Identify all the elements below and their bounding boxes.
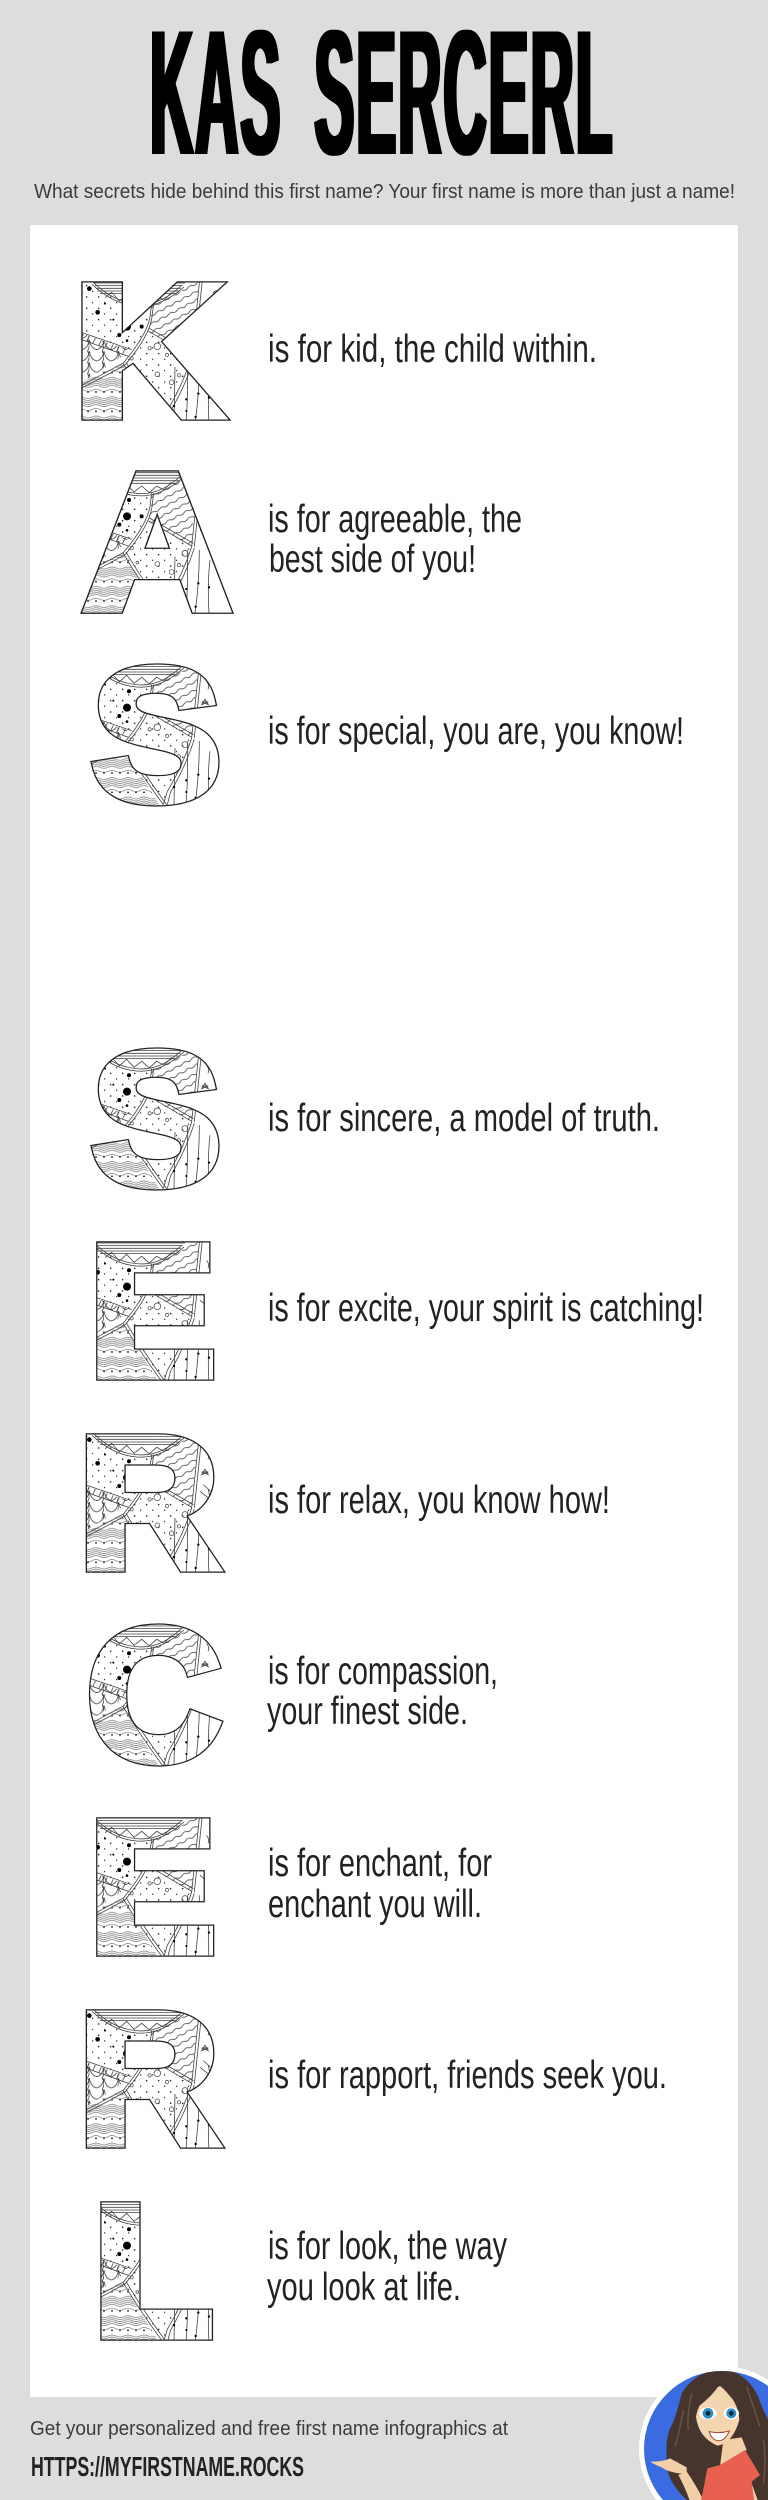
row K: is for kid, the child within. xyxy=(268,328,597,371)
row C xyxy=(88,1623,496,1767)
row E second: is for enchant, for xyxy=(268,1842,492,1885)
row E: E xyxy=(89,1207,216,1415)
row E xyxy=(96,1241,702,1381)
row E second xyxy=(96,1817,492,1957)
row R second xyxy=(86,2009,664,2149)
row A: A xyxy=(84,434,230,649)
row A: is for agreeable, the xyxy=(268,498,522,541)
avatar: woman in circle xyxy=(639,2366,768,2500)
row L xyxy=(100,2201,507,2341)
row E second: E xyxy=(89,1783,216,1991)
row C: C xyxy=(87,1592,221,1799)
row E second: enchant you will. xyxy=(268,1883,482,1926)
row R: is for relax, you know how! xyxy=(268,1479,610,1522)
row C: is for compassion, xyxy=(268,1650,498,1693)
row S xyxy=(90,663,682,807)
row R second: R xyxy=(79,1976,219,2183)
row C: your finest side. xyxy=(267,1690,468,1733)
footer text: Get your personalized and free first name infographics at xyxy=(30,2417,508,2440)
row A xyxy=(80,470,521,614)
row A: best side of you! xyxy=(269,538,476,581)
row R xyxy=(86,1433,608,1573)
row K: K xyxy=(74,248,220,455)
row S second: S xyxy=(92,1016,221,1223)
row R: R xyxy=(79,1400,219,1607)
row L: you look at life. xyxy=(267,2266,461,2309)
row L: L xyxy=(93,2167,213,2375)
row S: S xyxy=(92,632,221,839)
row S second xyxy=(90,1047,658,1191)
footer url: HTTPS://MYFIRSTNAME.ROCKS xyxy=(31,2451,304,2482)
row L: is for look, the way xyxy=(268,2225,507,2268)
subtitle: What secrets hide behind this first name? Your first name is more than just a name! xyxy=(34,180,735,203)
row K xyxy=(81,281,594,421)
